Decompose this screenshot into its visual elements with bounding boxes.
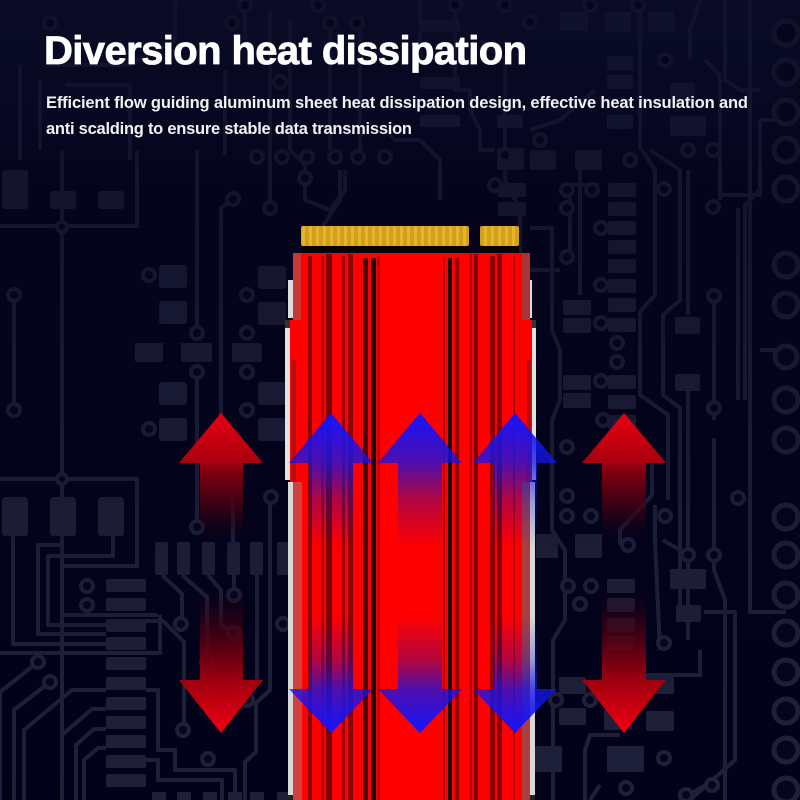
SSD heatsink xyxy=(285,226,536,800)
side rails xyxy=(285,280,536,800)
left red double arrow xyxy=(179,413,263,733)
description: Efficient flow guiding aluminum sheet heat dissipation design, effective heat insulation and xyxy=(46,94,748,112)
description: anti scalding to ensure stable data transmission xyxy=(46,120,412,138)
red body xyxy=(290,253,532,800)
blue arrow 2 xyxy=(378,413,462,733)
gold connector xyxy=(301,226,519,256)
blue arrow 3 xyxy=(473,413,557,733)
title: Diversion heat dissipation xyxy=(44,29,527,73)
blue arrow 1 xyxy=(289,413,373,733)
right red double arrow xyxy=(582,413,666,733)
fins xyxy=(292,254,531,800)
description xyxy=(46,94,748,138)
